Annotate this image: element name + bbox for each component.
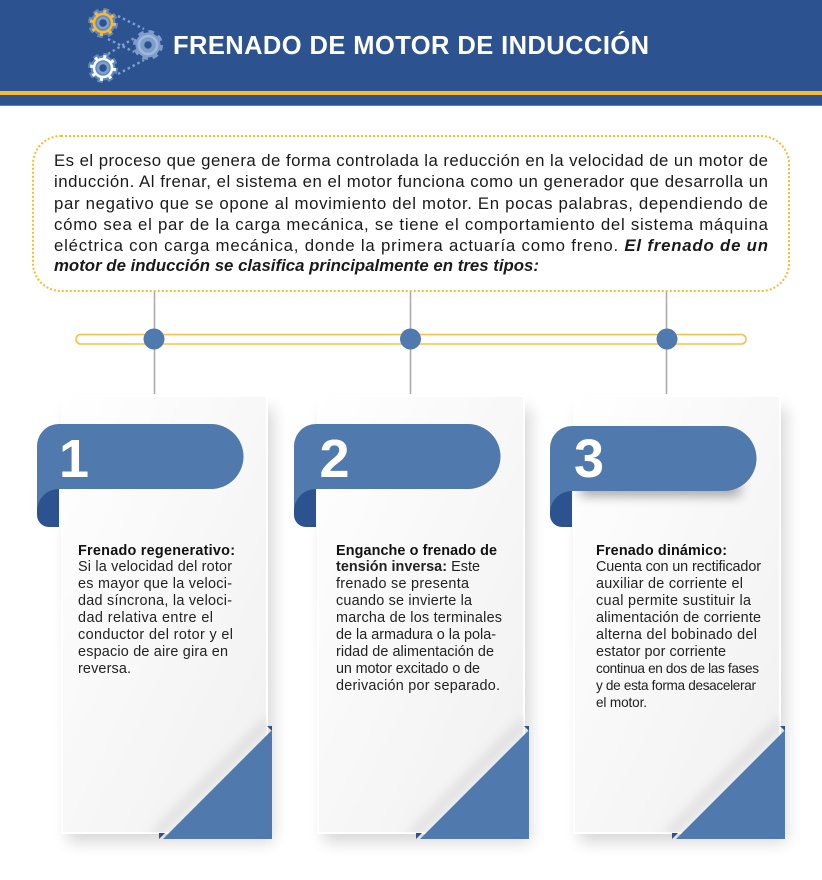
- text: card 2: frenado se presenta: [336, 576, 469, 592]
- text: card 2: un motor excitado o de: [336, 661, 480, 677]
- text: card 3: y de esta forma desacelerar: [596, 678, 756, 693]
- intro text panel: Es el proceso que genera de forma controlada la reducción en la velocidad de un motor de: [54, 151, 768, 170]
- text: card 2: ridad de alimentación de: [336, 644, 494, 660]
- text: card 2: de la armadura o la pola-: [336, 627, 496, 643]
- panel: card 2: [294, 396, 530, 842]
- intro text panel: par negativo que se opone al movimiento del motor. En pocas palabras, dependiendo de: [54, 194, 768, 213]
- icon: gears: [90, 10, 161, 81]
- number 2: 2: [320, 429, 350, 489]
- text: card 1: [78, 543, 235, 677]
- text: card 1: dad síncrona, la veloci-: [78, 593, 232, 609]
- text: card 1: Frenado regenerativo:: [78, 543, 235, 559]
- text: card 3: alterna del bobinado del: [596, 627, 757, 643]
- intro text panel: cómo sea el par de la carga mecánica, se tiene el comportamiento del sistema máquina: [54, 215, 769, 234]
- text: card 2: derivación por separado.: [336, 678, 500, 694]
- intro text panel: eléctrica con carga mecánica, donde la primera actuaría como freno. El frenado de un: [54, 236, 768, 255]
- ribbon 2: [294, 424, 500, 527]
- intro text panel: inducción. Al frenar, el sistema en el motor funciona como un generador que desarrolla un: [54, 172, 768, 191]
- ribbon 3: [550, 426, 756, 527]
- text: card 1: conductor del rotor y el: [78, 627, 233, 643]
- header banner: [0, 0, 822, 106]
- text: card 2: tensión inversa: Este: [336, 559, 480, 575]
- text: card 2: marcha de los terminales: [336, 610, 502, 626]
- text: card 3: estator por corriente: [596, 644, 726, 660]
- text: card 2: [336, 543, 502, 694]
- text: card 1: reversa.: [78, 661, 131, 677]
- text: card 1: dad relativa entre el: [78, 610, 213, 626]
- corner fold 2: [416, 726, 529, 839]
- panel: card 3: [550, 396, 786, 842]
- intro text panel: motor de inducción se clasifica principalmente en tres tipos:: [54, 256, 539, 275]
- text: card 3: continua en dos de las fases: [596, 661, 759, 676]
- text: card 3: auxiliar de corriente el: [596, 576, 743, 592]
- text: card 3: cual permite sustituir la: [596, 593, 751, 609]
- corner fold 3: [672, 726, 785, 839]
- text: card 3: Frenado dinámico:: [596, 543, 727, 559]
- text: card 3: alimentación de corriente: [596, 610, 761, 626]
- ribbon 1: [37, 424, 244, 527]
- text: card 1: es mayor que la veloci-: [78, 576, 232, 592]
- intro text panel: [33, 136, 789, 291]
- number 3: 3: [574, 429, 604, 489]
- corner fold 1: [159, 726, 272, 839]
- text: card 2: cuando se invierte la: [336, 593, 472, 609]
- text: card 1: Si la velocidad del rotor: [78, 559, 232, 575]
- text: card 3: Cuenta con un rectificador: [596, 559, 761, 575]
- connector lines: [154, 291, 666, 394]
- text: card 3: el motor.: [596, 695, 647, 710]
- text: card 2: Enganche o frenado de: [336, 543, 497, 559]
- number 1: 1: [59, 429, 89, 489]
- text: card 3: [596, 543, 761, 710]
- timeline bar: [76, 328, 746, 350]
- text: card 1: espacio de aire gira en: [78, 644, 228, 660]
- panel: card 1: [37, 396, 273, 842]
- title: FRENADO DE MOTOR DE INDUCCIÓN: [173, 30, 649, 60]
